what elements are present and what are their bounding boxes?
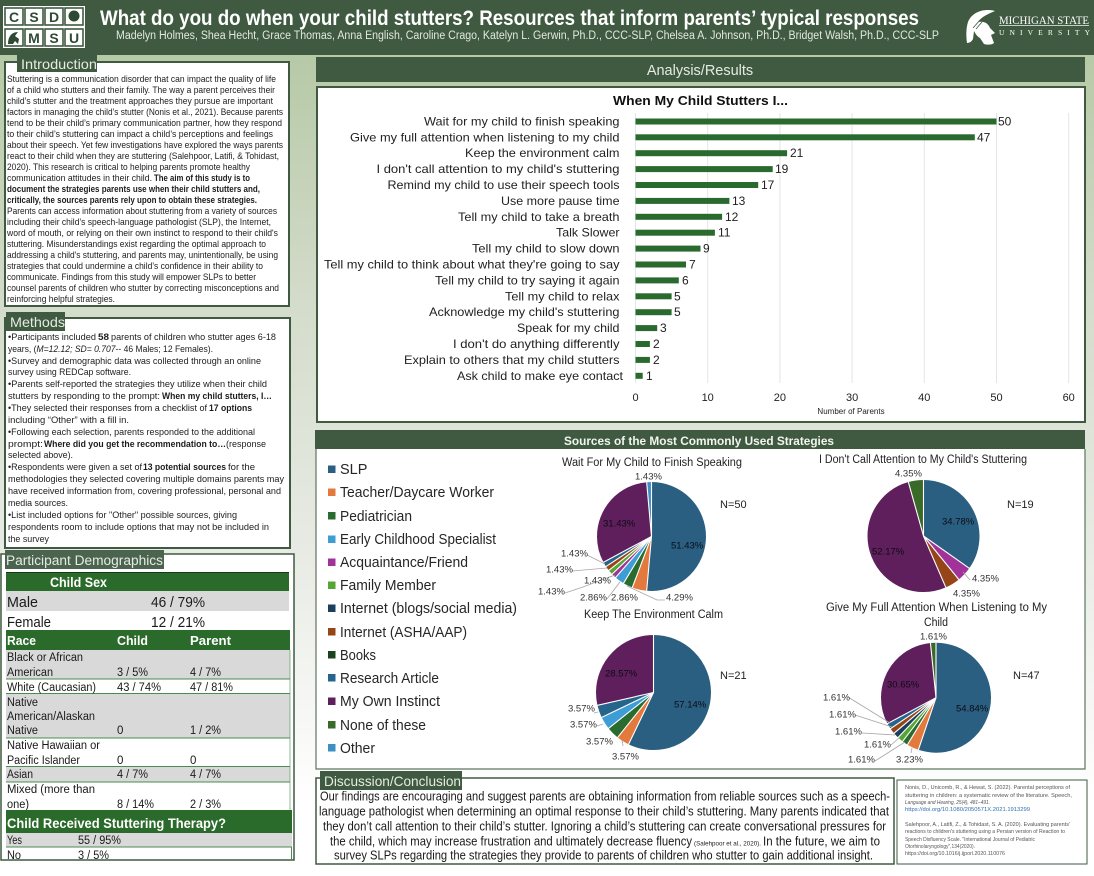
discussion text: language pathologist when determining an optimal response to their child’s stuttering. Many parents indicated that (319, 804, 889, 818)
table: race: 4 / 7% (190, 667, 221, 679)
methods text: •Following each selection, parents responded to the additional (8, 427, 255, 437)
bar labels: Ask child to make eye contact (457, 369, 624, 383)
pie chart: i don't call attention to my child's stuttering: 4.35% (895, 468, 922, 480)
pie chart: i don't call attention to my child's stuttering: N=19 (1007, 499, 1034, 511)
x axis: 0 (632, 392, 639, 404)
introduction text: communicate. Findings from this study will empower SLPs to better (7, 272, 256, 282)
introduction text: 2020). This research is critical to helping parents promote healthy (7, 162, 250, 172)
pie chart: give my full attention when listening to my child: 1.61% (864, 740, 891, 750)
introduction text: Parents can access information about stuttering from a variety of sources (7, 206, 277, 216)
methods text: •Participants included (8, 332, 96, 342)
table: race: 0 (117, 755, 123, 767)
introduction text: tend to be their child’s primary communication partner, how they respond (7, 118, 282, 128)
bars: 5 (674, 289, 681, 303)
panel: discussion/conclusion (316, 771, 894, 864)
discussion text (319, 790, 890, 862)
bars: 2 (653, 353, 660, 367)
methods text: media sources. (8, 498, 68, 508)
methods text: 13 potential sources (143, 462, 226, 472)
pie chart: wait for my child to finish speaking: 2.86% (611, 592, 638, 604)
table: race: 4 / 7% (117, 769, 148, 781)
legend: Family Member (340, 578, 436, 594)
legend: Pediatrician (340, 509, 412, 525)
methods text: •They selected their responses from a checklist of (8, 403, 207, 413)
bars (636, 114, 1012, 383)
heading: discussion/conclusion: Discussion/Conclusion (324, 773, 461, 789)
bar labels: Explain to others that my child stutters (404, 353, 620, 367)
table: race: Child (117, 633, 148, 648)
pie chart: keep the environment calm: 3.57% (570, 720, 597, 730)
discussion text: survey SLPs regarding the strategies they provide to parents of children who stutter to gain additional insight. (334, 848, 873, 862)
methods text: •List included options for "Other" possible sources, giving (8, 510, 237, 520)
introduction text: communication attitudes in their child. (7, 173, 152, 183)
pie chart: wait for my child to finish speaking: 31.43% (603, 518, 636, 530)
discussion text: In the future, we aim to (763, 834, 880, 848)
introduction text: strategies that could undermine a child’s confidence in their ability to (7, 261, 263, 271)
bars: 9 (703, 242, 710, 256)
logo: Michigan State University (966, 10, 1091, 45)
table: race: Race (7, 633, 36, 648)
introduction text: factors in managing the child’s stutter (Nonis et al., 2021). Because parents (7, 107, 283, 117)
bars: 17 (761, 178, 775, 192)
methods text: survey using REDCap software. (8, 367, 131, 377)
pie chart: keep the environment calm: N=21 (720, 670, 747, 682)
panel: participant demographics (1, 550, 294, 862)
logo: CSD MSU: S (29, 9, 39, 25)
logo: CSD MSU: U (69, 30, 79, 46)
heading: participant demographics: Participant Demographics (6, 553, 163, 568)
bar labels: Speak for my child (517, 321, 620, 335)
heading: introduction: Introduction (21, 56, 97, 72)
bar labels: I don't call attention to my child's stuttering (376, 162, 620, 176)
logo: CSD MSU: M (28, 30, 40, 46)
x axis: 10 (702, 392, 714, 404)
logo: Michigan State University: UNIVERSITY (999, 28, 1091, 37)
x axis: 30 (846, 392, 858, 404)
title: What do you do when your child stutters? Resources that inform parents’ typical responses (100, 7, 919, 30)
logo: CSD MSU: D (49, 9, 59, 25)
panel: references: Language and Hearing, 25(4), 481–491. (905, 800, 990, 806)
panel: references: stuttering in children: a systematic review of the literature. Speech, (905, 793, 1072, 799)
methods text (8, 332, 284, 544)
bar labels: I don't do anything differently (453, 337, 620, 351)
panel: references: Speech Disfluency Scale. "International Journal of Pediatric (905, 837, 1035, 843)
discussion text: (Salehpoor et al., 2020). (694, 842, 761, 848)
table: race: White (Caucasian) (7, 682, 96, 694)
pie chart: wait for my child to finish speaking: Wait For My Child to Finish Speaking (562, 457, 742, 469)
methods text: including “Other” with a fill in. (8, 415, 129, 425)
pie chart: keep the environment calm: 3.57% (568, 704, 595, 714)
table: child received stuttering therapy: Child Received Stuttering Therapy? (7, 815, 226, 831)
methods text: •Survey and demographic data was collected through an online (8, 356, 261, 366)
table: child received stuttering therapy: 55 / 95% (78, 835, 121, 847)
introduction text: word of mouth, or relying on their own instinct to respond to their child's (6, 228, 278, 238)
legend (328, 462, 517, 757)
legend: My Own Instinct (340, 694, 440, 710)
logo: CSD MSU: C (9, 9, 19, 25)
bars: 50 (998, 114, 1012, 128)
bar labels: Tell my child to slow down (472, 242, 620, 256)
legend: Internet (blogs/social media) (340, 601, 517, 617)
introduction text: react to their child when they are stuttering (Salehpoor, Latifi, & Tohidast, (7, 151, 279, 161)
bar labels: Give my full attention when listening to my child (350, 130, 620, 144)
x axis: Number of Parents (817, 407, 885, 416)
table: child sex: 46 / 79% (151, 595, 205, 611)
pie chart: give my full attention when listening to my child: 1.61% (835, 726, 862, 738)
x axis: 20 (774, 392, 786, 404)
legend: Teacher/Daycare Worker (340, 485, 494, 501)
table: race: Black or African (7, 652, 83, 664)
bars: 11 (718, 226, 731, 240)
chart title: When My Child Stutters I... (613, 93, 788, 108)
panel: introduction (5, 55, 289, 306)
legend: None of these (340, 718, 426, 734)
bar labels: Remind my child to use their speech tools (388, 178, 620, 192)
introduction text: child’s stutter and the treatment approaches they pursue are important (7, 96, 273, 106)
table: child sex (6, 572, 289, 631)
introduction text: counsel parents of children who stutter by correcting misconceptions and (7, 283, 279, 293)
table: child received stuttering therapy: 3 / 5% (78, 850, 109, 862)
legend: Books (340, 648, 376, 664)
introduction text: Stuttering is a communication disorder that can impact the quality of life (7, 74, 276, 84)
methods text: methodologies they selected covering multiple domains parents may (8, 474, 284, 484)
methods text: respondents room to include options that may not be included in (8, 522, 269, 532)
table: race: 0 (117, 725, 123, 737)
pie chart: give my full attention when listening to my child: 54.84% (956, 704, 989, 714)
x axis: 40 (918, 392, 930, 404)
legend: Acquaintance/Friend (340, 555, 468, 571)
methods text: prompt: (8, 439, 43, 449)
table: race: Native (7, 697, 38, 709)
methods text: parents of children who stutter ages 6-18 (111, 332, 276, 342)
methods text: •Parents self-reported the strategies they utilize when their child (8, 379, 267, 389)
bars: 3 (660, 321, 667, 335)
bar labels: Tell my child to take a breath (458, 210, 620, 224)
methods text: •Respondents were given a set of (8, 462, 142, 472)
bars: 19 (775, 162, 789, 176)
table: child received stuttering therapy: Yes (7, 835, 22, 847)
table: child received stuttering therapy (6, 810, 292, 862)
pie chart: keep the environment calm: 3.57% (586, 736, 613, 748)
table: race: 1 / 2% (190, 725, 221, 737)
introduction text: reinforcing helpful strategies. (7, 294, 115, 304)
table: race: 3 / 5% (117, 667, 148, 679)
panel: references: Salehpoor, A., Latifi, Z., & Tohidast, S. A. (2020). Evaluating parents' (905, 822, 1070, 828)
introduction text: including their child’s speech-language pathologist (SLP), the Internet, (7, 217, 271, 227)
panel: references: reactions to children's stuttering using a Persian version of Reaction to (905, 829, 1065, 835)
pie chart: wait for my child to finish speaking: 1.43% (546, 564, 573, 576)
methods text: selected above). (8, 450, 73, 460)
legend: Research Article (340, 671, 439, 687)
pie chart: keep the environment calm: 57.14% (674, 700, 707, 710)
methods text: Where did you get the recommendation to… (44, 439, 226, 449)
table: race: Pacific Islander (7, 755, 80, 767)
bar labels: Tell my child to think about what they're going to say (324, 258, 620, 272)
bars: 2 (653, 337, 660, 351)
pie chart: keep the environment calm: 28.57% (605, 668, 638, 680)
bar labels: Acknowledge my child's stuttering (429, 305, 620, 319)
methods text: stutters by responding to the prompt: (8, 391, 160, 401)
bars: 5 (674, 305, 681, 319)
methods text: (response (226, 439, 266, 449)
introduction text: The aim of this study is to (154, 173, 250, 183)
table: child sex: Female (7, 615, 51, 631)
panel: references (897, 780, 1087, 864)
introduction text: about their speech. Yet few investigations have explored the ways parents (7, 140, 283, 150)
heading: methods: Methods (10, 314, 65, 330)
header banner (0, 0, 1094, 55)
table: race: American (7, 667, 53, 679)
table: race: 4 / 7% (190, 769, 221, 781)
bar labels: Tell my child to try saying it again (435, 273, 620, 287)
pie chart: wait for my child to finish speaking: 51.43% (671, 540, 704, 552)
x axis (632, 392, 1075, 416)
table: child received stuttering therapy: No (7, 850, 21, 862)
pie chart: i don't call attention to my child's stuttering: I Don't Call Attention to My Child's Stuttering (819, 454, 1027, 466)
bars: 12 (725, 210, 739, 224)
table: child sex: 12 / 21% (151, 615, 205, 631)
bars: 6 (682, 273, 689, 287)
pie chart: wait for my child to finish speaking: 1.43% (584, 576, 611, 586)
table: race: Parent (190, 633, 232, 648)
panel: methods (5, 312, 290, 548)
table: race: 2 / 3% (190, 799, 221, 811)
pie chart: give my full attention when listening to my child: 1.61% (823, 692, 850, 704)
panel: bar chart when my child stutters (317, 87, 1085, 422)
pie chart: give my full attention when listening to my child: N=47 (1013, 670, 1040, 682)
methods text: When my child stutters, I… (162, 391, 272, 401)
heading: sources of the most commonly used strategies (315, 430, 1085, 449)
pie chart: give my full attention when listening to my child: 1.61% (848, 754, 875, 766)
table: race: 0 (190, 755, 196, 767)
table: child sex: Male (7, 595, 38, 611)
pie chart: give my full attention when listening to my child: 1.61% (829, 710, 856, 720)
pie chart: keep the environment calm: 3.57% (612, 752, 639, 762)
bars: 1 (646, 369, 653, 383)
panel: references: https://doi.org/10.1016/j.ijporl.2020.110076 (905, 851, 1005, 857)
pie chart: wait for my child to finish speaking: 2.86% (580, 592, 607, 604)
table: race: 43 / 74% (117, 682, 161, 694)
table: race: Native (7, 725, 38, 737)
pie chart: keep the environment calm (568, 609, 747, 762)
methods text: have received information from, covering professional, personal and (8, 486, 281, 496)
introduction text: of a child who stutters and their family. The way a parent perceives their (7, 85, 275, 95)
pie chart: wait for my child to finish speaking (538, 457, 747, 604)
table: child sex: Child Sex (50, 574, 107, 590)
panel: references: https://doi.org/10.1080/2050571X.2021.1913299 (905, 807, 1030, 813)
bars: 47 (977, 130, 991, 144)
legend: Internet (ASHA/AAP) (340, 625, 467, 641)
bar labels: Keep the environment calm (465, 146, 620, 160)
x axis: 50 (990, 392, 1003, 404)
bar labels: Use more pause time (501, 194, 620, 208)
heading: analysis/results (316, 57, 1085, 82)
panel: references: Nonis, D., Unicomb, R., & Hewat, S. (2022). Parental perceptions of (905, 785, 1070, 791)
pie chart: give my full attention when listening to my child (823, 602, 1047, 766)
bars: 21 (790, 146, 804, 160)
authors: Madelyn Holmes, Shea Hecht, Grace Thomas, Anna English, Caroline Crago, Katelyn L. Gerwin, Ph.D., CCC-SLP, Chelsea A. Johnson, Ph.D., Bridget Walsh, Ph.D., CCC-SLP (116, 30, 939, 42)
table: race (6, 630, 290, 811)
bars: 7 (689, 258, 696, 272)
table: race: one) (7, 799, 29, 811)
introduction text: to their child’s stuttering can impact a child’s perceptions and feelings (7, 129, 273, 139)
pie chart: give my full attention when listening to my child: 3.23% (896, 754, 923, 766)
panel: sources (316, 449, 1085, 769)
pie chart: wait for my child to finish speaking: 4.29% (666, 592, 693, 604)
pie chart: wait for my child to finish speaking: 1.43% (635, 472, 662, 482)
pie chart: i don't call attention to my child's stuttering: 4.35% (972, 574, 999, 584)
pie chart: i don't call attention to my child's stuttering: 34.78% (942, 516, 975, 528)
logo: CSD MSU (3, 6, 85, 48)
pie chart: i don't call attention to my child's stuttering: 4.35% (953, 588, 980, 600)
pie chart: keep the environment calm: Keep The Environment Calm (584, 609, 723, 621)
pie chart: give my full attention when listening to my child: Give My Full Attention When Listening to My (826, 602, 1047, 614)
legend: SLP (340, 462, 367, 478)
bar labels: Tell my child to relax (505, 289, 620, 303)
introduction text: stuttering. Misunderstandings exist regarding the optimal approach to (7, 239, 266, 249)
bar labels: Talk Slower (556, 226, 620, 240)
introduction text: document the strategies parents use when their child stutters and, (7, 184, 260, 194)
heading: sources of the most commonly used strategies: Sources of the Most Commonly Used Strategies (564, 434, 834, 448)
table: race: 47 / 81% (190, 682, 233, 694)
methods text: the survey (8, 534, 49, 544)
table: race: American/Alaskan (7, 711, 95, 723)
pie chart: give my full attention when listening to my child: 1.61% (920, 632, 947, 642)
bar labels (324, 114, 624, 383)
discussion text: they don’t call attention to their child’s stutter. Ignoring a child’s stuttering can create conversational pressures for (323, 820, 886, 834)
logo: CSD MSU: S (49, 30, 59, 46)
discussion text: Our findings are encouraging and suggest parents are obtaining information from reliable sources such as a speech- (320, 790, 890, 804)
pie chart: wait for my child to finish speaking: N=50 (720, 499, 747, 511)
table: race: Mixed (more than (7, 784, 95, 796)
x axis: 60 (1063, 392, 1075, 404)
pie chart: i don't call attention to my child's stuttering (819, 454, 1034, 600)
bars: 13 (732, 194, 746, 208)
pie chart: wait for my child to finish speaking: 1.43% (538, 586, 565, 598)
bar labels: Wait for my child to finish speaking (424, 114, 620, 128)
methods text: for the (228, 462, 255, 472)
panel: references: Otorhinolaryngology",134(2020). (905, 844, 975, 850)
introduction text: addressing a child's stuttering, and parents may, unintentionally, be using (7, 250, 278, 260)
pie chart: i don't call attention to my child's stuttering: 52.17% (872, 546, 905, 558)
legend: Other (340, 741, 375, 757)
heading: analysis/results: Analysis/Results (647, 63, 753, 79)
introduction text: critically, the sources parents rely upon to obtain these strategies. (7, 195, 257, 205)
pie chart: give my full attention when listening to my child: Child (924, 617, 948, 629)
discussion text: the child, which may increase frustration and ultimately decrease fluency (330, 834, 693, 848)
table: race: Asian (7, 769, 33, 781)
pie chart: wait for my child to finish speaking: 1.43% (561, 548, 588, 560)
legend: Early Childhood Specialist (340, 532, 496, 548)
methods text: 17 options (209, 403, 252, 413)
table: race: 8 / 14% (117, 799, 154, 811)
table: race: Native Hawaiian or (7, 740, 100, 752)
methods text: 58 (98, 332, 109, 342)
introduction text (6, 74, 283, 304)
methods text: years, (M=12.12; SD= 0.707-- 46 Males; 12 Females). (8, 344, 213, 354)
pie chart: give my full attention when listening to my child: 30.65% (887, 680, 920, 690)
